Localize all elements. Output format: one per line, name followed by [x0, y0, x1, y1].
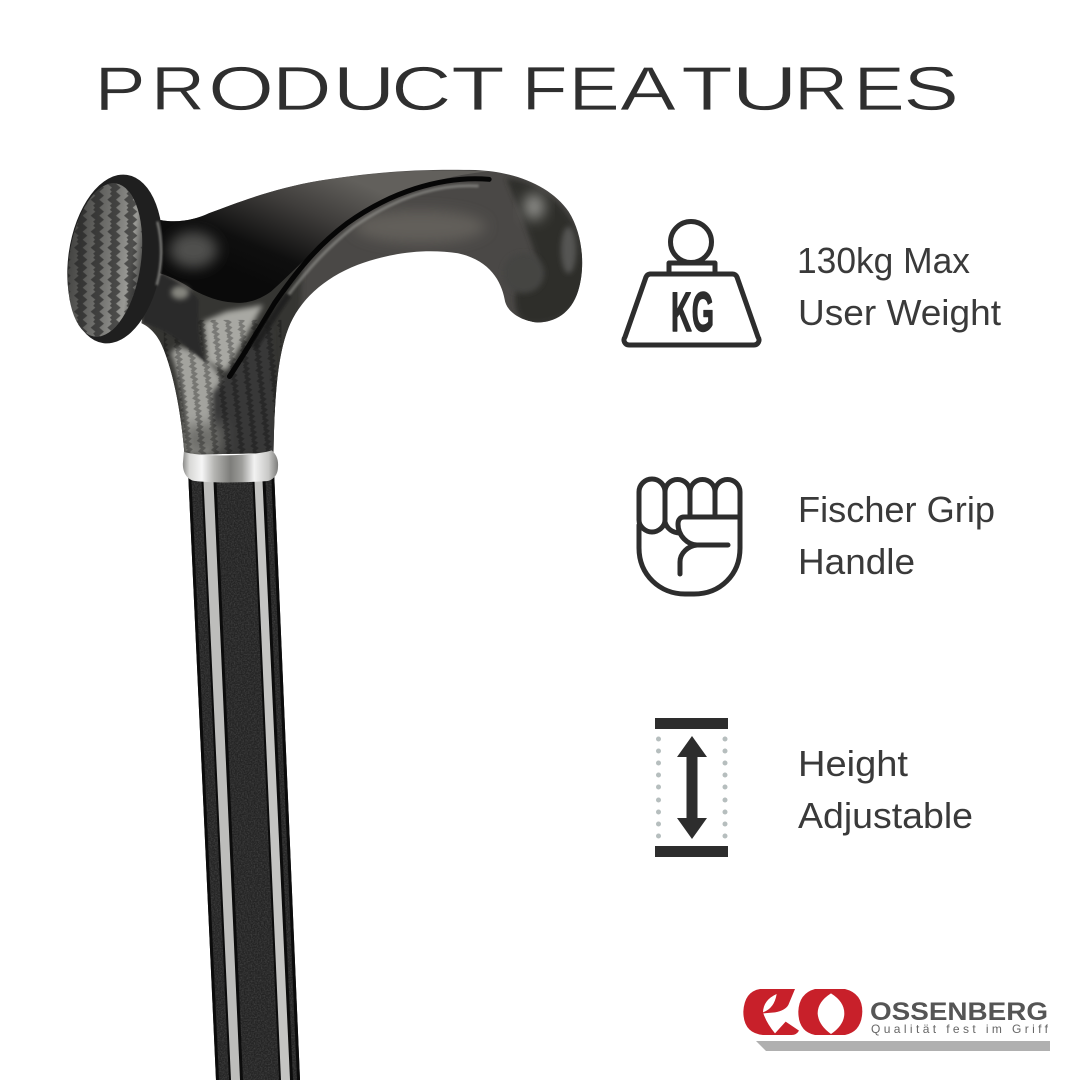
- label: grip: Fischer Grip: [798, 489, 995, 530]
- tip shading: [506, 178, 586, 324]
- title: C: [391, 55, 452, 124]
- label: grip: Handle: [798, 541, 915, 582]
- feature: weight capacity: [624, 222, 1001, 345]
- title: E: [854, 55, 905, 124]
- logo mark: [743, 989, 862, 1035]
- title: U: [333, 55, 396, 124]
- label: weight: [797, 240, 1001, 333]
- cane shaft: [188, 470, 300, 1080]
- label: grip: [798, 489, 995, 582]
- label: weight: 130kg Max: [797, 240, 970, 281]
- label: height: [798, 743, 973, 836]
- feature: height: [655, 718, 973, 857]
- neck under knob: [143, 275, 207, 363]
- label: weight: User Weight: [798, 292, 1001, 333]
- logo underline bar: [756, 1041, 1050, 1051]
- knob end cap: [57, 168, 173, 350]
- soft matte grip: [153, 171, 489, 303]
- icon: kilogram weight: [624, 222, 759, 345]
- title: D: [272, 55, 332, 124]
- icon: fist: [639, 479, 740, 594]
- title: A: [620, 55, 677, 124]
- logo wordmark: OSSENBERG: [870, 998, 1048, 1026]
- cane handle: [129, 160, 596, 483]
- title: S: [903, 55, 959, 124]
- title: O: [208, 55, 274, 124]
- title: [95, 55, 959, 124]
- title: F: [522, 55, 568, 124]
- stem carbon shading: [146, 267, 302, 460]
- handle body: [141, 170, 582, 454]
- walking cane product photo: [57, 160, 596, 1080]
- title: T: [451, 55, 505, 124]
- logo: Ossenberg: [743, 989, 1050, 1051]
- label: height: Height: [798, 743, 908, 784]
- title: U: [731, 55, 798, 124]
- title: P: [95, 55, 146, 124]
- label: height: Adjustable: [798, 795, 973, 836]
- metal collar: [183, 450, 278, 483]
- carbon weave knob face: [59, 178, 151, 342]
- icon: kilogram weight: KG: [671, 280, 714, 343]
- icon: height arrow: [655, 718, 728, 857]
- feature: grip: [639, 479, 995, 594]
- title: E: [569, 55, 620, 124]
- logo tagline: Qualität fest im Griff: [871, 1022, 1049, 1036]
- glossy ridge: [230, 179, 489, 376]
- title: T: [681, 55, 733, 124]
- title: R: [151, 55, 205, 124]
- title: R: [794, 55, 848, 124]
